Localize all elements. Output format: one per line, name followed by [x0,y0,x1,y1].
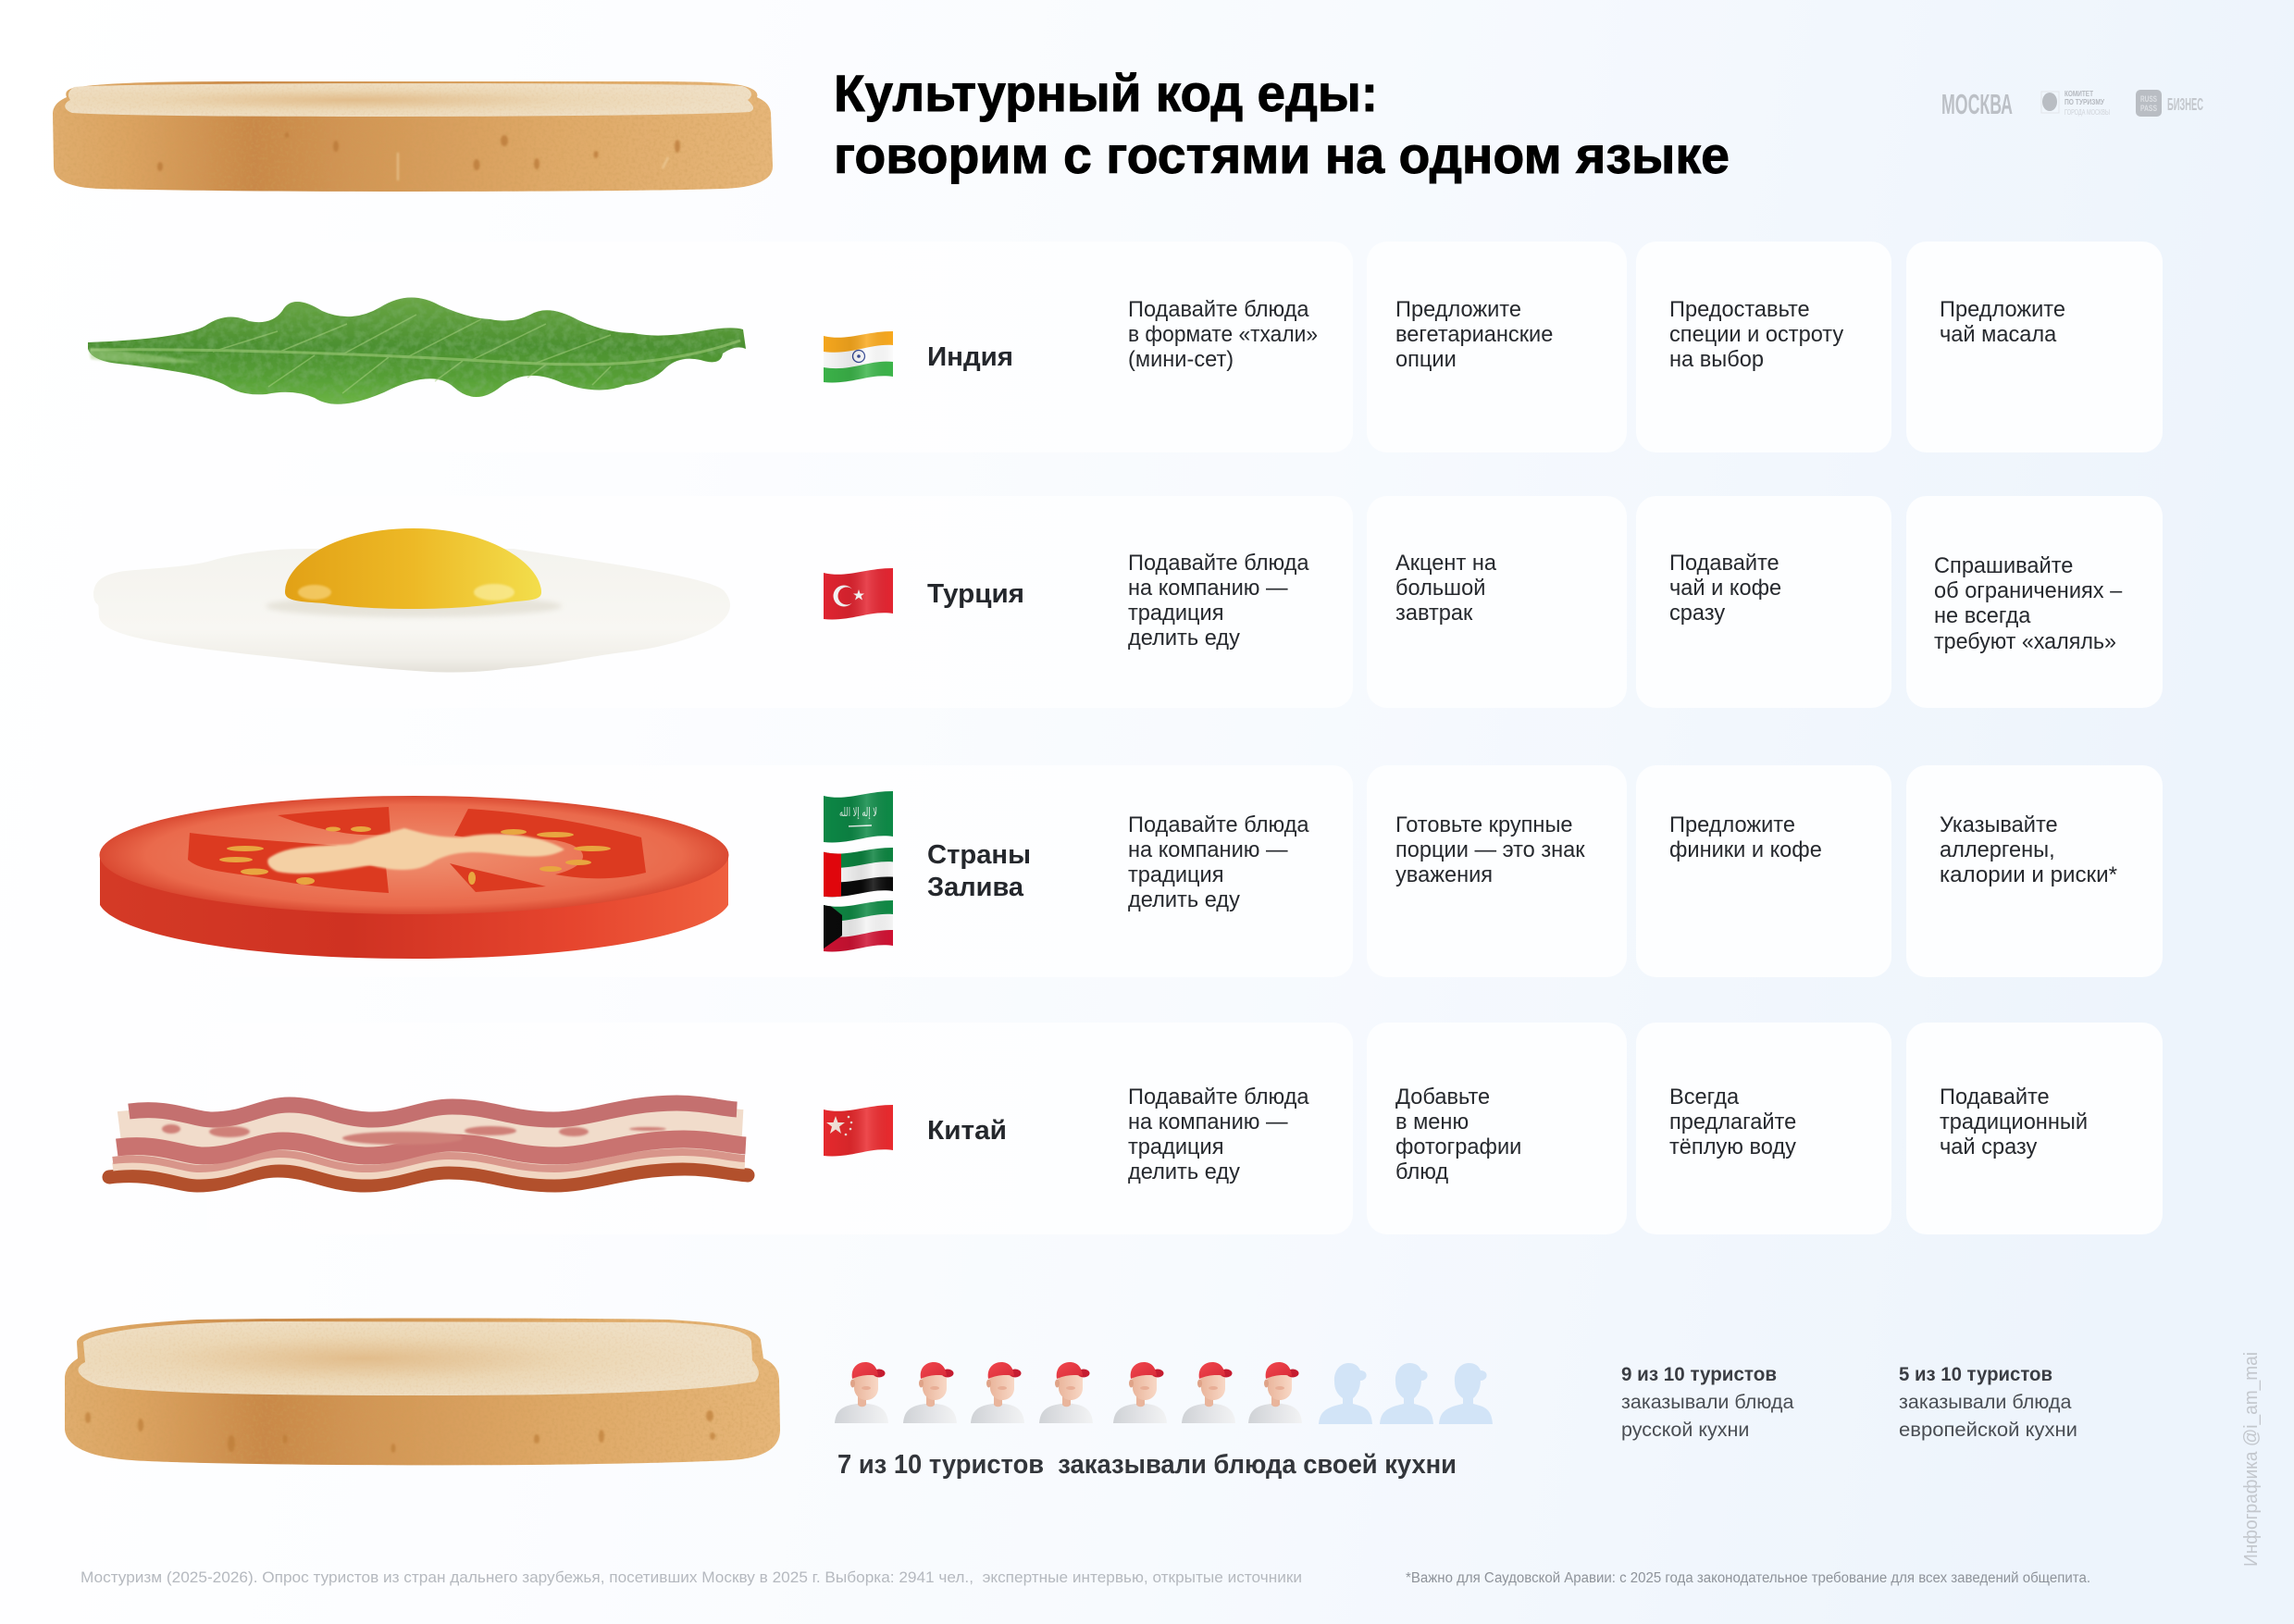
advice: Turkey 2: завтрак [1395,601,1473,626]
advice: China 4: традиционный [1940,1110,2088,1134]
statistic: russian cuisine: русской кухни [1621,1419,1749,1441]
advice: Gulf 3: финики и кофе [1669,838,1822,862]
advice: Turkey 1: Подавайте блюда [1128,552,1309,576]
advice: India 1: (мини-сет) [1128,348,1234,372]
statistic: russian cuisine: заказывали блюда [1621,1391,1793,1413]
advice: India 1: в формате «тхали» [1128,323,1318,347]
source note: Мостуризм (2025-2026). Опрос туристов из стран дальнего зарубежья, посетивших Москву в 2025 г. Выборка: 2941 чел., экспертные интервью, открытые источники [81,1568,1302,1586]
illustration: lettuce leaf [88,297,746,404]
country: Turkey: Турция [927,579,1024,609]
advice: China 4: Подавайте [1940,1085,2050,1110]
flag: UAE [824,848,893,898]
advice: India 2: опции [1395,348,1457,372]
advice: China 3: предлагайте [1669,1110,1796,1134]
flag: Kuwait [824,900,893,951]
advice: China 1: Подавайте блюда [1128,1085,1309,1110]
advice: China 1: на компанию — [1128,1110,1288,1134]
statistic: russian cuisine: 9 из 10 туристов [1621,1363,1777,1385]
title: говорим с гостями на одном языке [834,126,1730,184]
logo: Russpass business [2136,90,2203,117]
advice: India 4: Предложите [1940,298,2065,322]
flag: China [824,1105,893,1160]
advice: China 2: блюд [1395,1160,1448,1184]
advice: Turkey 3: Подавайте [1669,552,1779,576]
advice: India 2: вегетарианские [1395,323,1553,347]
advice: China 3: тёплую воду [1669,1135,1796,1159]
illustration: top bread slice [53,81,773,192]
advice: Gulf 4: Указывайте [1940,813,2058,837]
panel: row Turkey [0,496,2163,708]
advice: Gulf 1: делить еду [1128,888,1240,912]
advice: Gulf 4: калории и риски* [1940,863,2117,887]
advice: Gulf 1: на компанию — [1128,838,1288,862]
advice: Turkey 4: Спрашивайте [1934,554,2073,578]
advice: Gulf 2: порции — это знак [1395,838,1585,862]
panel: row China [0,1023,2163,1234]
title [834,64,1730,184]
logo: Russpass business: БИЗНЕС [2167,95,2203,114]
pictogram: 7 of 10 tourists [835,1362,1493,1424]
advice: Turkey 4: не всегда [1934,604,2031,628]
flag: Saudi Arabia [824,791,893,847]
advice: Gulf 2: уважения [1395,863,1493,887]
advice: Turkey 1: традиция [1128,601,1223,626]
logos [1941,88,2203,120]
title: Культурный код еды: [834,64,1378,122]
logo: tourism committee [2041,90,2110,117]
illustration: bacon strip [109,1103,748,1185]
statistic: european cuisine: европейской кухни [1899,1419,2077,1441]
advice: Turkey 3: сразу [1669,601,1725,626]
advice: India 3: Предоставьте [1669,298,1810,322]
illustration: bottom bread slice [65,1318,780,1465]
flag: India [824,331,893,383]
advice: China 2: Добавьте [1395,1085,1490,1110]
advice: India 4: чай масала [1940,323,2057,347]
advice: India 3: специи и остроту [1669,323,1843,347]
logo: Russpass business: PASS [2140,104,2157,113]
advice: Turkey 1: на компанию — [1128,576,1288,601]
illustration: tomato slice [100,796,729,959]
advice: Gulf 1: традиция [1128,863,1223,887]
statistic: own cuisine: 7 из 10 туристов заказывали блюда своей кухни [837,1450,1457,1480]
flag: Turkey [824,568,893,624]
advice: China 2: в меню [1395,1110,1469,1134]
advice: India 1: Подавайте блюда [1128,298,1309,322]
logo: tourism committee: КОМИТЕТ [2065,90,2093,98]
country: Gulf states: Залива [927,873,1024,902]
advice: Turkey 2: большой [1395,576,1485,601]
advice: Gulf 4: аллергены, [1940,838,2055,862]
credit: Инфографика @i_am_mai [2241,1352,2262,1567]
statistic: european cuisine: 5 из 10 туристов [1899,1363,2052,1385]
country: India: Индия [927,342,1013,372]
advice: Turkey 4: требуют «халяль» [1934,630,2116,654]
statistic: european cuisine: заказывали блюда [1899,1391,2071,1413]
logo: Moscow: МОСКВА [1941,88,2013,120]
advice: India 3: на выбор [1669,348,1764,372]
advice: China 1: делить еду [1128,1160,1240,1184]
illustration: fried egg [93,528,730,673]
advice: Turkey 4: об ограничениях – [1934,579,2123,603]
advice: Turkey 2: Акцент на [1395,552,1497,576]
logo: Russpass business: RUSS [2140,94,2157,104]
advice: Turkey 3: чай и кофе [1669,576,1781,601]
logo: tourism committee: ПО ТУРИЗМУ [2065,98,2105,106]
advice: China 2: фотографии [1395,1135,1521,1159]
country: China: Китай [927,1116,1007,1146]
advice: Gulf 2: Готовьте крупные [1395,813,1573,837]
advice: Gulf 1: Подавайте блюда [1128,813,1309,837]
advice: Turkey 1: делить еду [1128,626,1240,651]
footnote: *Важно для Саудовской Аравии: с 2025 года законодательное требование для всех заведений общепита. [1406,1570,2090,1586]
advice: Gulf 3: Предложите [1669,813,1795,837]
flag: Saudi Arabia: لا إله إلا الله [839,806,877,820]
advice: China 3: Всегда [1669,1085,1740,1110]
logo: tourism committee: ГОРОДА МОСКВЫ [2065,108,2110,117]
advice: China 1: традиция [1128,1135,1223,1159]
country: Gulf states: Страны [927,840,1031,870]
advice: China 4: чай сразу [1940,1135,2037,1159]
panel: row India [0,242,2163,452]
advice: India 2: Предложите [1395,298,1521,322]
panel: row Gulf countries [0,765,2163,977]
